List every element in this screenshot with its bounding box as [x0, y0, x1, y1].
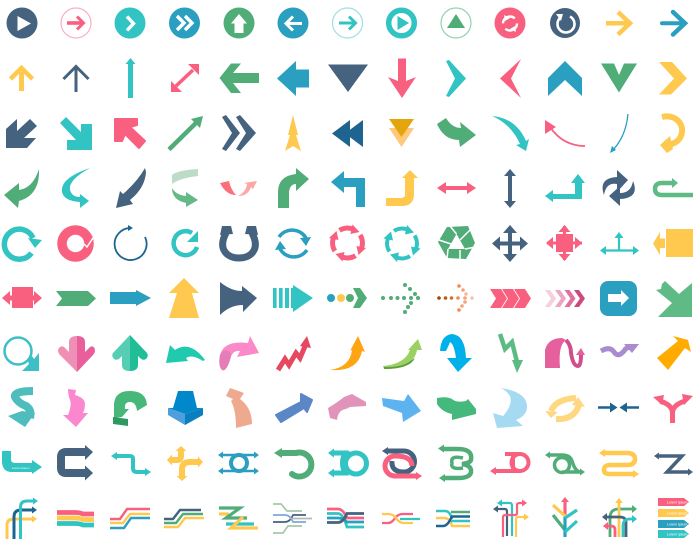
icon: navy z-shaped arrow [654, 452, 693, 476]
icon: three stepped arrows [164, 510, 204, 527]
row 8: ribbon and perspective arrows [8, 388, 693, 428]
icon: blue thin curved arrow [610, 114, 628, 153]
icon: pink triple chevron [490, 289, 531, 308]
icon: green knot arrow [545, 452, 585, 476]
icon: stacked label arrows: Lorem Ipsum [667, 532, 688, 536]
icon: pink winding arrow [63, 389, 88, 427]
icon: pink refresh circle [494, 8, 526, 38]
icon: pink loop arrow [490, 454, 528, 475]
icon: teal outlined circle arrow [332, 8, 362, 38]
icon: green dotted arrow [381, 283, 420, 314]
icon: teal striped arrow [273, 285, 313, 312]
icon: navy vertical double arrow [504, 169, 516, 208]
icon: blue left arrow circle [278, 8, 308, 38]
icon: green lightning arrow [500, 334, 523, 373]
icon: green up arrow circle [224, 8, 254, 38]
icon: teal four-arrow cycle [384, 225, 420, 262]
row 7: 3D style arrows [4, 334, 691, 373]
icon: orange swoosh arrow [330, 336, 365, 370]
icon: lime swoosh arrow [383, 339, 422, 369]
icon: navy converging arrows [598, 402, 639, 412]
icon: stacked label arrows: Lorem Ipsum [667, 500, 688, 504]
icon: teal ring with arrow [4, 338, 39, 371]
icon: pink thick ring arrow [62, 230, 93, 257]
icon: pink fork arrow [653, 394, 693, 423]
icon: yellow hook arrow [660, 116, 682, 153]
icon: navy sync arrows [603, 170, 635, 206]
icon: navy u-shaped arrows [220, 226, 258, 258]
icon: pink ribbon arrows [220, 181, 257, 196]
icon: blue ring connector arrows [218, 452, 259, 474]
icon: yellow arrow [606, 12, 630, 34]
icon: routed arrows fan [493, 500, 529, 537]
icon: stacked label arrows [658, 498, 689, 538]
icon: green down chevron [601, 64, 637, 92]
icon: pink thin curved arrow [545, 120, 585, 146]
row 10: multi-line arrows [7, 497, 689, 539]
icon: teal chevron circle [114, 8, 146, 38]
icon: blue block arrow [110, 290, 151, 306]
icon: navy thin up arrow [64, 66, 88, 92]
icon: yellow corner up arrow [386, 170, 418, 206]
icon: green corner arrow [656, 281, 692, 317]
icon: teal stepped double arrow [111, 452, 151, 476]
icon: teal curved left arrow [166, 345, 205, 363]
icon: pink two-tone down arrow [58, 336, 95, 372]
icon: pink outlined circle arrow [61, 8, 91, 38]
icon: teal ring play [389, 10, 414, 36]
row 1: circular icons and simple arrows [6, 8, 685, 38]
icon: green two-tone up arrow [112, 335, 148, 371]
icon: green long diagonal arrow [169, 116, 203, 150]
icon: gold double down triangle [389, 119, 414, 147]
icon: blue rounded square arrow [600, 281, 637, 316]
icon: blue left arrow [277, 61, 309, 96]
icon: green bent arrow [278, 168, 309, 208]
icon: cyan u-turn down arrow [440, 334, 472, 372]
icon: blue up chevron [548, 61, 582, 96]
icon: yellow up arrow [10, 68, 32, 91]
icon: blue arrow [662, 12, 685, 34]
row 5: circular arrows and multi-way arrows [4, 224, 693, 262]
icon: green left arrow [220, 64, 259, 93]
icon: green recycle symbol [438, 226, 476, 260]
icon: teal reload arrow [174, 231, 198, 255]
icon: green twisted double arrow [438, 444, 471, 482]
icon: green ribbon chevron [56, 291, 96, 306]
row 9: labelled routed arrows [2, 444, 693, 482]
icon: teal banner arrow [2, 451, 42, 474]
icon: teal ring bracket arrows [328, 448, 366, 478]
icon: light blue sweeping arrow [493, 388, 527, 428]
icon: teal circular arrow [4, 229, 42, 259]
row 6: block arrows, dotted arrows and chevrons [2, 278, 692, 318]
icon: pink curved arrow [219, 336, 259, 370]
icon: blue double chevron circle [169, 8, 200, 38]
icon: stacked label arrows: Lorem Ipsum [667, 512, 688, 516]
icon: yellow right chevron [659, 62, 687, 94]
icon: multi-colour crossing lines [436, 511, 470, 526]
icon: blue corner left arrow [331, 171, 365, 207]
icon: navy double chevron [222, 115, 256, 151]
icon: magenta wave arrow [545, 338, 585, 368]
icon: navy play circle [6, 8, 38, 38]
icon: three wavy bands [57, 512, 94, 525]
icon: yellow square left arrow [653, 229, 693, 257]
icon: branching tree arrows [553, 497, 577, 537]
icon: pink four-arrow cycle [329, 224, 366, 262]
icon: teal chevron [446, 60, 466, 97]
icon: green u-turn 3D arrow [113, 391, 147, 426]
icon: muted crossing lines [273, 504, 312, 533]
icon: navy diagonal down-left arrow [6, 119, 37, 148]
icon: pink double diagonal arrow [171, 64, 199, 92]
row 3: diagonal arrows and curved arrows [6, 114, 682, 153]
icon: zigzag bands [219, 508, 258, 528]
icon: green bent 3D arrow [437, 397, 476, 420]
icon: pink diagonal up-left arrow [115, 119, 145, 148]
icon: green loop arrow [274, 448, 311, 477]
icon: pink down arrow [388, 58, 416, 98]
row 4: swooshes and bent arrows [4, 168, 693, 208]
icon: purple wave arrow [601, 344, 639, 355]
icon: pink block double arrow [2, 287, 42, 308]
icon: dark blue double left arrow [332, 120, 363, 147]
icon: dots and green chevron [327, 288, 367, 308]
icon: blue perspective down arrow [168, 391, 203, 425]
icon: three stepped lines [110, 509, 150, 528]
icon: teal corner double arrow [545, 174, 585, 202]
icon: navy swoosh arrow [116, 168, 146, 208]
icon: teal banner arrow: Lorem Ipsum [12, 466, 30, 470]
icon: mauve bent arrow [328, 394, 366, 420]
icon: stacked label arrows: Lorem Ipsum [667, 522, 688, 526]
icon: navy four-way move arrow [492, 225, 528, 262]
icon: three vertical bent arrows [7, 498, 38, 539]
icon: yellow sync arrows [545, 397, 585, 419]
icon: red zigzag arrow [278, 336, 311, 370]
row 2: solid arrows and chevrons [10, 58, 687, 98]
icon: yellow s-curve arrow [599, 449, 639, 478]
icon: green outlined triangle [441, 8, 471, 38]
icon: four crossing lines [327, 509, 364, 527]
icon: navy thin circular arrow [115, 225, 147, 260]
icon: teal thin curved arrow [492, 116, 529, 151]
icon: light green ribbon arrow [172, 169, 198, 207]
icon: teal s-curve arrow [8, 391, 35, 427]
icon: bundle of crossing arrows [602, 498, 637, 537]
icon: orange diagonal arrow [657, 336, 691, 370]
icon: pink left chevron [500, 59, 521, 98]
icon: navy and pink interlocked arrows [382, 447, 422, 480]
icon: yellow tall up arrow [169, 278, 199, 318]
icon: navy reload circle [550, 8, 580, 38]
icon: teal long up arrow [126, 58, 136, 98]
icon: teal swoosh arrow [62, 168, 90, 208]
icon: braided lines [382, 514, 420, 523]
icon: navy flared arrow [220, 282, 257, 315]
icon: sky blue bent arrow [382, 394, 421, 422]
icon: green swoosh arrow [4, 169, 39, 208]
icon: green u-turn arrow [655, 178, 693, 195]
icon: orange fading dotted arrow [437, 284, 474, 312]
icon: yellow spear arrow [285, 115, 301, 151]
icon: salmon curved up arrow [226, 388, 252, 428]
icon: blue diagonal 3D arrow [276, 394, 312, 422]
icon: teal diagonal down-right arrow [60, 117, 92, 150]
icon: blue sync circle [275, 230, 311, 257]
icon: navy double branch arrow [61, 445, 93, 480]
icon: yellow four-way routed arrow [167, 446, 203, 481]
icon: navy down triangle [328, 64, 368, 92]
icon: pink square four-way arrow [546, 225, 582, 261]
icon: teal three-way arrow [600, 232, 639, 255]
icon: green curved arrow [437, 118, 476, 147]
icon: fading pink chevrons [545, 290, 585, 307]
icon: pink horizontal double arrow [437, 182, 476, 194]
